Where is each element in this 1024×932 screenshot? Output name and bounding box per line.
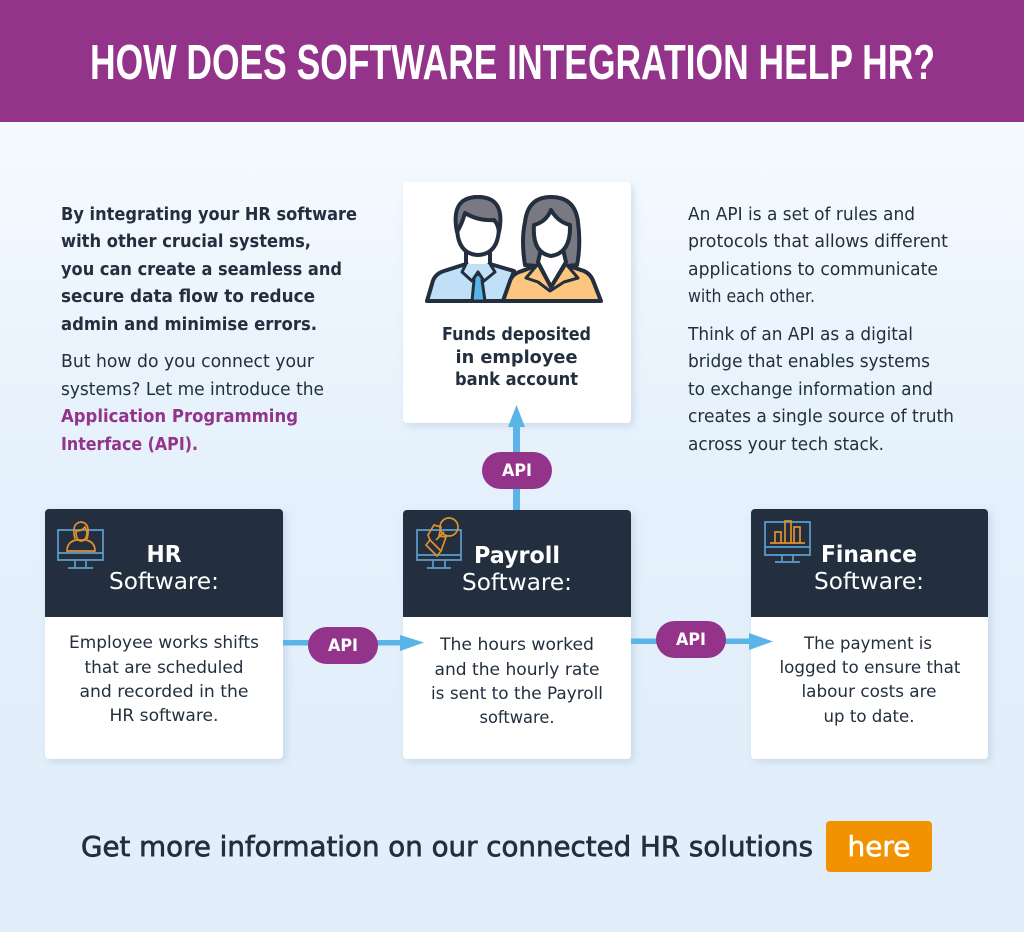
API explanation text block: across your tech stack.	[688, 435, 884, 455]
icon: monitor with coin in hand	[417, 518, 461, 568]
panel: finance software: logged to ensure that	[780, 658, 961, 678]
panel: payroll software: software.	[480, 708, 554, 728]
panel: payroll software: and the hourly rate	[434, 660, 600, 680]
panel: HR software: and recorded in the	[80, 682, 248, 702]
panel: payroll software: Software:	[462, 570, 572, 596]
API explanation text block: An API is a set of rules and	[688, 205, 915, 225]
icon: monitor with bar chart	[765, 521, 810, 562]
title banner	[0, 0, 1024, 122]
panel: HR software	[45, 509, 283, 759]
API explanation text block: with each other.	[688, 287, 815, 307]
panel: HR software: Employee works shifts	[69, 633, 259, 653]
intro text block: you can create a seamless and	[61, 260, 342, 280]
call to action text: Get more information on our connected HR solutions	[81, 830, 813, 863]
icon: monitor with person	[58, 522, 103, 568]
button: here: here	[848, 830, 910, 863]
panel: HR software: that are scheduled	[84, 658, 244, 678]
API explanation text block: applications to communicate	[688, 260, 938, 280]
intro text block: Application Programming	[61, 407, 298, 427]
panel: HR software: HR software.	[110, 706, 218, 726]
intro text block: with other crucial systems,	[61, 232, 311, 252]
API explanation text block: Think of an API as a digital	[687, 325, 913, 345]
panel: finance software: Finance	[821, 542, 917, 568]
panel: payroll software: The hours worked	[439, 635, 594, 655]
API pill: top: API	[502, 461, 532, 481]
API explanation text block: protocols that allows different	[688, 232, 948, 252]
icon: two employees	[427, 197, 601, 301]
arrow: HR to payroll	[283, 635, 424, 651]
intro text block: Interface (API).	[61, 435, 198, 455]
intro text block: admin and minimise errors.	[61, 315, 317, 335]
API pill: left: API	[328, 636, 358, 656]
arrow: payroll to funds deposited	[508, 405, 525, 510]
API pill: right: API	[676, 630, 706, 650]
API explanation text block: bridge that enables systems	[688, 352, 930, 372]
API pill: right	[656, 621, 726, 658]
panel: payroll software	[403, 510, 631, 759]
panel: funds deposited: in employee	[456, 348, 578, 368]
panel: funds deposited: Funds deposited	[442, 325, 591, 345]
intro text block: By integrating your HR software	[61, 205, 357, 225]
panel: finance software: Software:	[814, 569, 924, 595]
API explanation text block: to exchange information and	[688, 380, 933, 400]
panel: finance software	[751, 509, 988, 759]
API explanation text block	[687, 205, 954, 455]
panel: HR software: Software:	[109, 569, 219, 595]
panel: payroll software: is sent to the Payroll	[431, 684, 603, 704]
button: here	[826, 821, 932, 872]
API pill: top	[482, 452, 552, 489]
panel: finance software: labour costs are	[802, 682, 936, 702]
panel: funds deposited: bank account	[455, 370, 578, 390]
API explanation text block: creates a single source of truth	[688, 407, 954, 427]
panel: payroll software: Payroll	[474, 543, 560, 569]
panel: funds deposited	[403, 182, 631, 423]
API pill: left	[308, 627, 378, 664]
panel: finance software: up to date.	[824, 707, 914, 727]
intro text block: secure data flow to reduce	[61, 287, 315, 307]
intro text block: systems? Let me introduce the	[61, 380, 324, 400]
panel: HR software: HR	[146, 542, 182, 568]
arrow: payroll to finance	[631, 633, 773, 650]
panel: finance software: The payment is	[803, 634, 932, 654]
intro text block: But how do you connect your	[61, 352, 315, 372]
intro text block	[61, 205, 357, 455]
